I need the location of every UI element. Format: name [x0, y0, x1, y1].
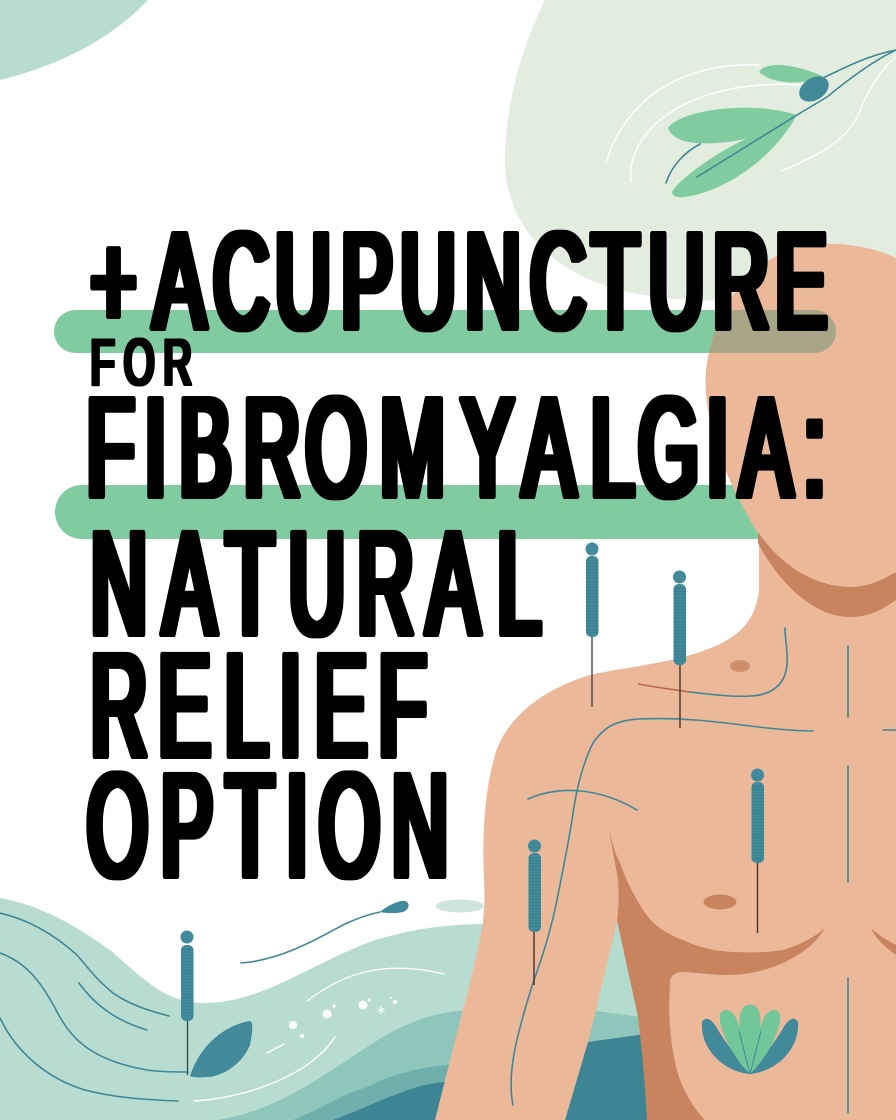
- body figure: [435, 244, 896, 1120]
- title line: natural: NATURAL: [91, 502, 541, 665]
- acupuncture needle 3: [751, 768, 764, 933]
- right torso shadow: [871, 928, 896, 955]
- torso shadow: [609, 827, 825, 1120]
- torso gap showing waves: [565, 922, 650, 1120]
- collar mark: [730, 660, 750, 672]
- pale ellipse: [436, 900, 484, 912]
- acupuncture needle 1: [586, 542, 598, 707]
- green highlight bar 1: [54, 310, 836, 353]
- title line: for: FOR: [91, 326, 192, 399]
- title line: acupuncture: +ACUPUNCTURE: [91, 206, 827, 358]
- illustration: leaf sprig: [606, 50, 896, 197]
- title line: option: OPTION: [87, 744, 448, 907]
- acupuncture needle 4: [528, 840, 541, 985]
- title: [87, 206, 827, 907]
- green highlight bar 2: [55, 485, 815, 539]
- title line: relief: RELIEF: [91, 624, 426, 787]
- icon: lotus: [702, 1004, 798, 1074]
- icon: seed with curved stem: [241, 901, 409, 963]
- meridian lines: body: [511, 628, 896, 1113]
- pale green blob: top right: [505, 0, 896, 301]
- bottom left waves: [0, 898, 490, 1120]
- bar overlap on head: [709, 310, 836, 353]
- corner blob: top left: [0, 0, 148, 80]
- skin silhouette: [435, 244, 896, 1120]
- acupuncture needle 5: [180, 930, 194, 1075]
- icon: teal leaf: [190, 1021, 252, 1077]
- chin shadow: [758, 532, 896, 617]
- acupuncture needle 2: [673, 570, 686, 728]
- title line: fibromyalgia: FIBROMYALGIA:: [87, 370, 825, 527]
- white sparkle lines and dots: [194, 968, 444, 1101]
- meridian lines: waves: [0, 913, 188, 1101]
- chest mark: [704, 894, 736, 910]
